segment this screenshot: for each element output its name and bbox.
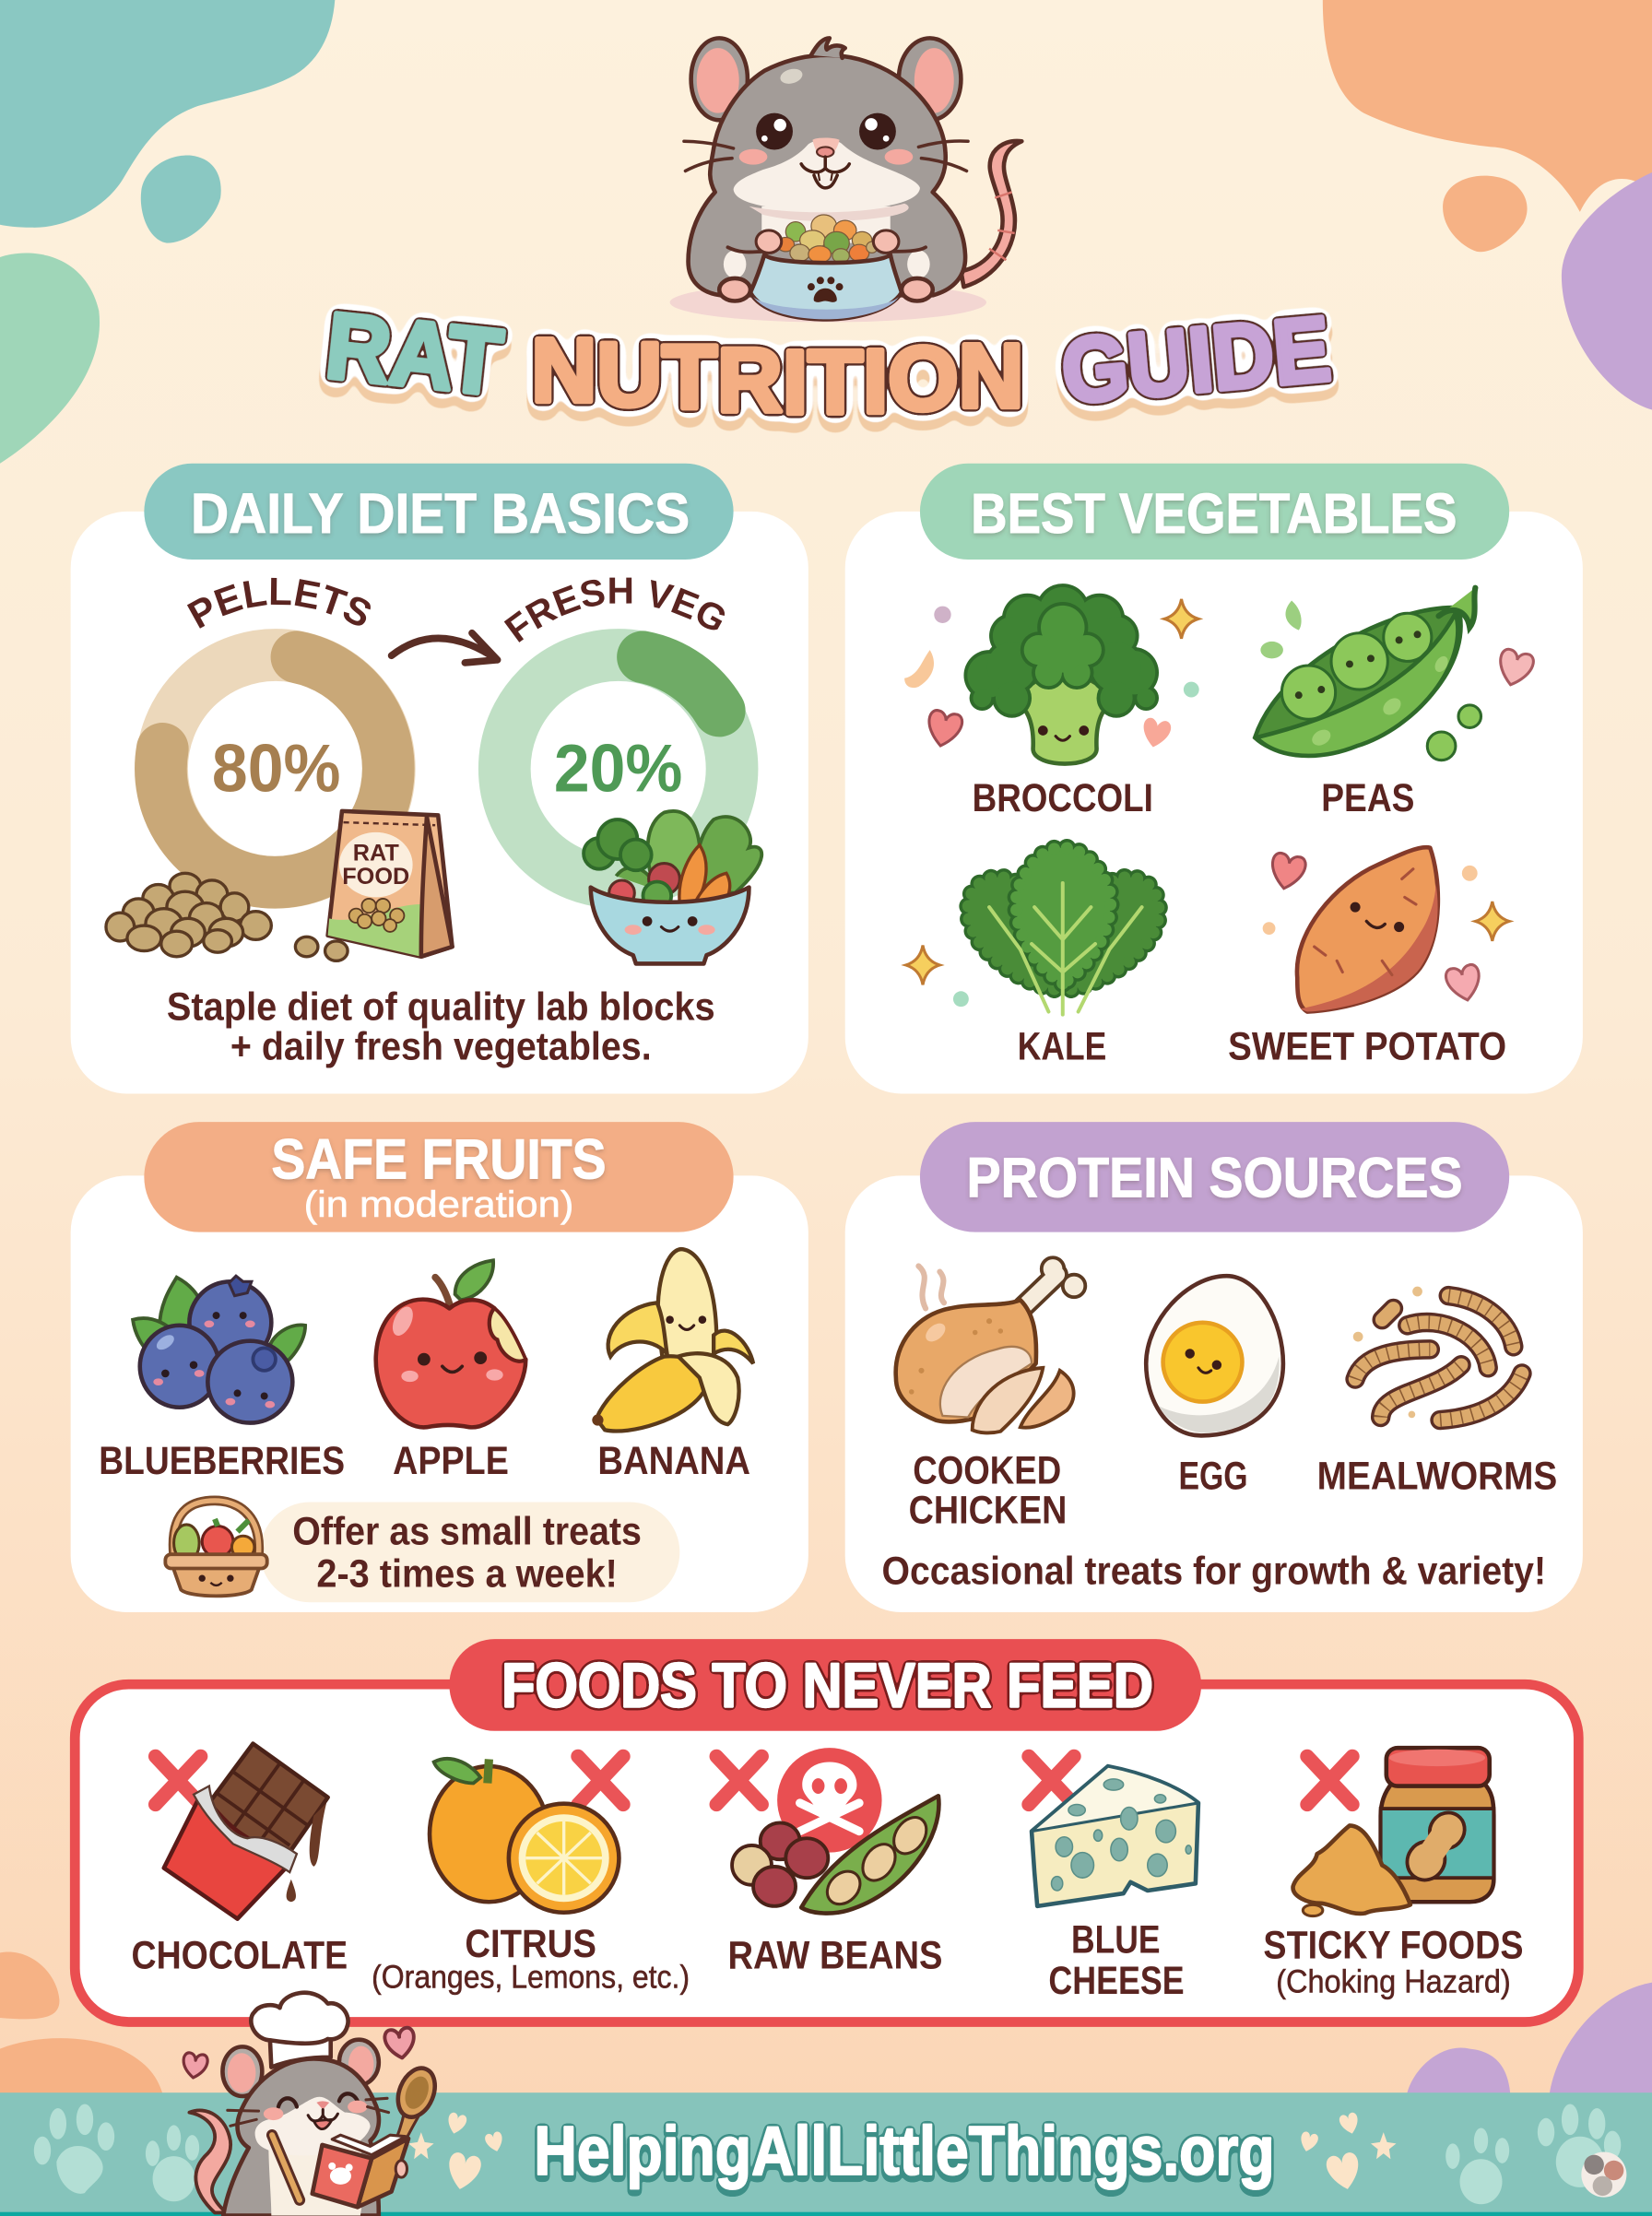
donut chart: fresh veg 20% xyxy=(504,654,732,882)
hearts xyxy=(182,2027,417,2080)
label: chocolate: CHOCOLATE xyxy=(132,1933,348,1977)
label: blueberries: BLUEBERRIES xyxy=(99,1439,345,1483)
icon: broccoli xyxy=(963,583,1159,764)
label: cooked chicken: CHICKEN xyxy=(909,1488,1067,1532)
hearts and stars xyxy=(408,2112,1397,2192)
donut chart: pellets 80%: 80% xyxy=(212,729,340,806)
label: apple: APPLE xyxy=(393,1439,509,1483)
icon: apple xyxy=(376,1260,525,1427)
label: sweet potato: SWEET POTATO xyxy=(1228,1025,1506,1069)
callout: treat frequency: Offer as small treats xyxy=(292,1509,642,1553)
icon: pellet pile xyxy=(106,873,348,961)
label: sticky foods: (Choking Hazard) xyxy=(1276,1963,1511,1999)
icon: mealworms xyxy=(1353,1287,1522,1420)
icon: citrus fruits xyxy=(430,1759,619,1913)
icon: banana xyxy=(592,1249,753,1432)
heading pill: safe fruits: (in moderation) xyxy=(304,1185,573,1225)
label: broccoli: BROCCOLI xyxy=(973,776,1153,820)
curved label: fresh veg: FRESH VEG xyxy=(503,577,725,642)
wooden spoon xyxy=(391,2063,442,2152)
icon: skull and crossbones xyxy=(777,1748,882,1853)
icon: kale xyxy=(968,848,1159,1015)
icon: fruit basket xyxy=(165,1501,267,1596)
label: cooked chicken: COOKED xyxy=(913,1449,1061,1493)
icon: red x raw beans xyxy=(716,1756,761,1804)
title: RAT xyxy=(322,293,507,415)
chef hat xyxy=(251,1993,348,2068)
logo badge xyxy=(1581,2152,1626,2198)
website url: HelpingAllLittleThings.org xyxy=(534,2112,1275,2189)
panel: safe fruits xyxy=(71,1122,808,1612)
icon: sweet potato xyxy=(1297,847,1438,1012)
label: citrus: CITRUS xyxy=(465,1922,596,1966)
icon: chocolate bar xyxy=(164,1744,328,1919)
label: blue cheese: BLUE xyxy=(1071,1917,1161,1962)
heading pill: daily diet basics: DAILY DIET BASICS xyxy=(191,481,690,545)
icon: rat food bag: FOOD xyxy=(342,864,409,890)
recipe book xyxy=(313,2135,408,2207)
callout: treat frequency: 2-3 times a week! xyxy=(316,1551,618,1596)
icon: rat food bag: RAT xyxy=(353,841,399,866)
panel: daily diet basics xyxy=(70,463,808,1093)
icon: cooked chicken xyxy=(896,1257,1085,1432)
icon: peanut butter jar xyxy=(1381,1748,1493,1902)
panel: best vegetables xyxy=(845,464,1583,1093)
icon: peanut butter blob xyxy=(1293,1825,1410,1916)
icon: blueberries xyxy=(133,1276,305,1423)
text: staple diet note: + daily fresh vegetables. xyxy=(230,1025,652,1069)
heading pill: best vegetables xyxy=(920,464,1509,560)
heading pill: safe fruits: SAFE FRUITS xyxy=(271,1126,607,1190)
heading pill: safe fruits xyxy=(144,1122,734,1232)
decorations: broccoli xyxy=(904,599,1199,750)
decorations: sweet potato xyxy=(1263,852,1509,1004)
title: NUTRITION xyxy=(531,319,1023,432)
label: mealworms: MEALWORMS xyxy=(1317,1455,1557,1499)
icon: red x blue cheese xyxy=(1029,1756,1074,1804)
decorations: peas xyxy=(1260,600,1535,760)
label: blue cheese xyxy=(1048,1917,1185,2003)
label: cooked chicken xyxy=(909,1449,1067,1532)
label: banana: BANANA xyxy=(597,1439,750,1483)
footer band xyxy=(0,2092,1652,2216)
label: citrus xyxy=(372,1922,690,1996)
chef rat mascot xyxy=(182,1993,442,2216)
callout: treat frequency xyxy=(260,1502,679,1602)
paw prints xyxy=(34,2104,1621,2204)
title: GUIDE xyxy=(1058,298,1334,423)
label: kale: KALE xyxy=(1018,1025,1106,1069)
icon: raw beans xyxy=(732,1796,938,1914)
heading pill: foods to never feed: FOODS TO NEVER FEED xyxy=(502,1652,1153,1721)
icon: salad bowl xyxy=(584,811,761,963)
text: staple diet note: Staple diet of quality lab blocks xyxy=(167,985,715,1030)
heading pill: foods to never feed xyxy=(449,1639,1201,1731)
text: protein note: Occasional treats for growth & variety! xyxy=(882,1549,1546,1593)
text: staple diet note xyxy=(167,985,715,1069)
heading pill: best vegetables: BEST VEGETABLES xyxy=(971,481,1457,545)
label: blue cheese: CHEESE xyxy=(1048,1959,1185,2003)
panel: foods to never feed xyxy=(75,1639,1578,2022)
title xyxy=(322,293,1334,432)
donut chart: fresh veg 20%: 20% xyxy=(554,729,682,806)
mascot rat with food bowl xyxy=(670,38,1021,322)
icon: red x sticky foods xyxy=(1307,1756,1352,1804)
label: raw beans: RAW BEANS xyxy=(727,1933,942,1977)
icon: red x chocolate xyxy=(156,1756,201,1804)
decorations: kale xyxy=(906,945,969,1007)
label: citrus: (Oranges, Lemons, etc.) xyxy=(372,1960,690,1996)
label: sticky foods: STICKY FOODS xyxy=(1263,1924,1524,1968)
panel: protein sources xyxy=(845,1122,1583,1612)
label: egg: EGG xyxy=(1178,1455,1248,1499)
arrow xyxy=(392,633,498,663)
label: peas: PEAS xyxy=(1321,776,1414,820)
icon: red x citrus xyxy=(578,1756,623,1804)
heading pill: daily diet basics xyxy=(144,464,734,560)
label: sticky foods xyxy=(1263,1924,1524,1999)
icon: pea pod xyxy=(1255,588,1475,756)
wooden stick xyxy=(272,2135,300,2200)
icon: rat food bag xyxy=(328,811,453,957)
icon: egg xyxy=(1146,1276,1283,1435)
donut chart: pellets 80% xyxy=(160,654,389,882)
curved label: pellets: PELLETS xyxy=(187,577,371,629)
heading pill: protein sources xyxy=(920,1122,1509,1232)
icon: blue cheese xyxy=(1032,1766,1198,1906)
heading pill: protein sources: PROTEIN SOURCES xyxy=(967,1145,1463,1208)
